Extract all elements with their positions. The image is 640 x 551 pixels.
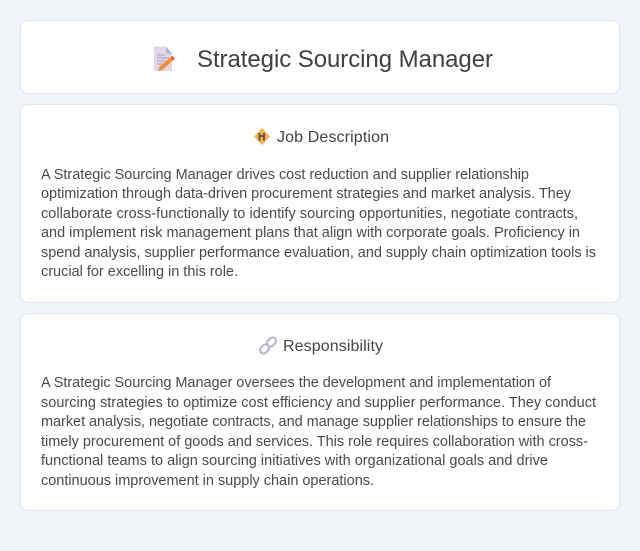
text block: responsibility: sourcing strategies to optimize cost efficiency and supplier performance. They conduct (41, 395, 596, 411)
text block: responsibility: A Strategic Sourcing Manager oversees the development and implementation of (41, 375, 552, 391)
icon: document with pencil (154, 46, 175, 71)
panel: title card (20, 20, 620, 94)
text block: job description: crucial for excelling in this role. (41, 264, 238, 280)
text block: job description: and implement risk management plans that align with corporate goals. Proficiency in (41, 225, 580, 241)
text block: job description: A Strategic Sourcing Manager drives cost reduction and supplier relationship (41, 167, 529, 183)
text block: responsibility: functional teams to align sourcing initiatives with organizational goals and drive (41, 453, 548, 469)
text block: responsibility: market analysis, negotiate contracts, and manage supplier relationships to ensure the (41, 414, 586, 430)
heading: job description: Job Description (277, 129, 389, 146)
text block: responsibility: continuous improvement in supply chain operations. (41, 473, 374, 489)
text block: responsibility (41, 375, 596, 489)
panel: responsibility (20, 314, 620, 510)
heading: responsibility: Responsibility (283, 338, 383, 355)
text block: job description: optimization through data-driven procurement strategies and market analysis. They (41, 186, 572, 202)
title: Strategic Sourcing Manager (197, 46, 493, 73)
text block: job description: spend analysis, supplier performance evaluation, and supply chain optimization tools is (41, 245, 596, 261)
text block: job description: collaborate cross-functionally to identify sourcing opportunities, negotiate contracts, (41, 206, 578, 222)
text block: responsibility: timely procurement of goods and services. This role requires collaboration with cross- (41, 434, 588, 450)
panel: job description (20, 104, 620, 302)
icon: chain link (258, 336, 278, 355)
text block: job description (41, 167, 596, 280)
icon: diamond sign (254, 128, 270, 145)
